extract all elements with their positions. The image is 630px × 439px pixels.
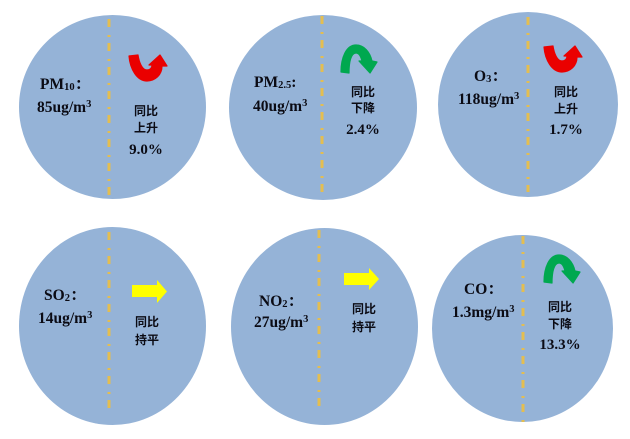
panel: PM10 — [19, 15, 206, 199]
panel: CO — [432, 235, 613, 422]
icon: red rising arrow — [544, 46, 582, 72]
circle: O3 background — [438, 12, 618, 197]
icon: yellow flat arrow — [132, 280, 167, 303]
heading: PM10 concentration: PM — [40, 76, 64, 93]
heading: O3 concentration: 3 — [514, 91, 519, 102]
panel: SO2 — [19, 227, 206, 425]
heading: CO concentration: 1.3mg/m — [452, 304, 509, 321]
heading: NO2 concentration: 2 — [282, 299, 288, 310]
text: CO year-on-year fall: 13.3% — [539, 337, 581, 353]
text: O3 year-on-year rise: 1.7% — [549, 122, 583, 138]
text: PM10 year-on-year rise: 同比 — [134, 104, 158, 118]
icon: green falling arrow — [341, 45, 377, 73]
circle: PM2.5 background — [229, 15, 417, 200]
text: O3 year-on-year rise: 同比 — [554, 85, 578, 99]
text: PM2.5 year-on-year fall — [346, 85, 380, 138]
heading: PM10 concentration: 10 — [64, 82, 75, 93]
divider: CO dashed line — [522, 236, 524, 422]
text: SO2 year-on-year flat: 持平 — [135, 332, 159, 347]
heading: NO2 concentration: 3 — [303, 314, 308, 325]
text: PM10 year-on-year rise: 上升 — [134, 120, 158, 135]
heading: O3 concentration: ： — [491, 68, 507, 85]
heading: PM10 concentration: ： — [75, 76, 90, 93]
text: SO2 year-on-year flat: 同比 — [135, 315, 159, 329]
icon: yellow flat arrow — [344, 268, 379, 290]
heading: O3 concentration: O — [474, 68, 486, 85]
text: O3 year-on-year rise: 上升 — [554, 101, 578, 116]
heading: SO2 concentration: 3 — [87, 310, 92, 321]
heading: SO2 concentration: ： — [70, 287, 85, 304]
heading: SO2 concentration: 14ug/m — [38, 310, 87, 327]
heading: SO2 concentration: SO — [44, 287, 65, 304]
heading: PM2.5 concentration: 2.5 — [278, 80, 291, 91]
heading: SO2 concentration: 2 — [65, 293, 70, 304]
circle: NO2 background — [231, 228, 418, 425]
divider: PM10 dashed line — [108, 19, 110, 197]
text: PM2.5 year-on-year fall: 下降 — [351, 100, 375, 115]
heading: O3 concentration: 3 — [486, 74, 491, 85]
heading: PM10 concentration: 85ug/m — [37, 99, 86, 116]
divider: O3 dashed line — [526, 17, 530, 192]
text: CO year-on-year fall — [539, 300, 581, 353]
heading: PM2.5 concentration: 40ug/m — [253, 98, 302, 115]
circle: PM10 background — [19, 15, 206, 199]
heading: CO concentration: 3 — [509, 304, 515, 315]
heading: O3 concentration: 118ug/m — [458, 91, 514, 108]
text: CO year-on-year fall: 下降 — [548, 316, 572, 331]
panel: NO2 — [231, 228, 418, 425]
divider: NO2 dashed line — [318, 230, 320, 408]
heading: PM2.5 concentration: PM — [254, 74, 278, 91]
panel: O3 — [438, 12, 618, 197]
text: O3 year-on-year rise — [549, 85, 583, 138]
text: NO2 year-on-year flat — [352, 302, 376, 334]
text: NO2 year-on-year flat: 持平 — [352, 319, 376, 334]
panel: PM2.5 — [229, 15, 417, 200]
heading: PM2.5 concentration: : — [291, 74, 296, 91]
divider: PM2.5 dashed line — [320, 16, 324, 195]
text: PM10 year-on-year rise: 9.0% — [129, 142, 163, 158]
heading: PM10 concentration: 3 — [86, 99, 91, 110]
icon: red rising arrow — [129, 55, 167, 81]
text: PM2.5 year-on-year fall: 2.4% — [346, 122, 380, 138]
circle: SO2 background — [19, 227, 206, 425]
text: PM10 year-on-year rise — [129, 104, 163, 158]
icon: green falling arrow — [544, 255, 580, 283]
text: CO year-on-year fall: 同比 — [548, 300, 572, 314]
divider: SO2 dashed line — [108, 232, 110, 408]
text: SO2 year-on-year flat — [135, 315, 159, 347]
text: NO2 year-on-year flat: 同比 — [352, 302, 376, 316]
heading: NO2 concentration: ： — [288, 293, 303, 310]
text: PM2.5 year-on-year fall: 同比 — [351, 85, 375, 99]
heading: CO concentration: CO： — [464, 281, 503, 298]
heading: NO2 concentration: NO — [259, 293, 282, 310]
circle: CO background — [432, 235, 613, 422]
heading: PM2.5 concentration: 3 — [302, 98, 307, 109]
heading: NO2 concentration: 27ug/m — [254, 314, 303, 331]
